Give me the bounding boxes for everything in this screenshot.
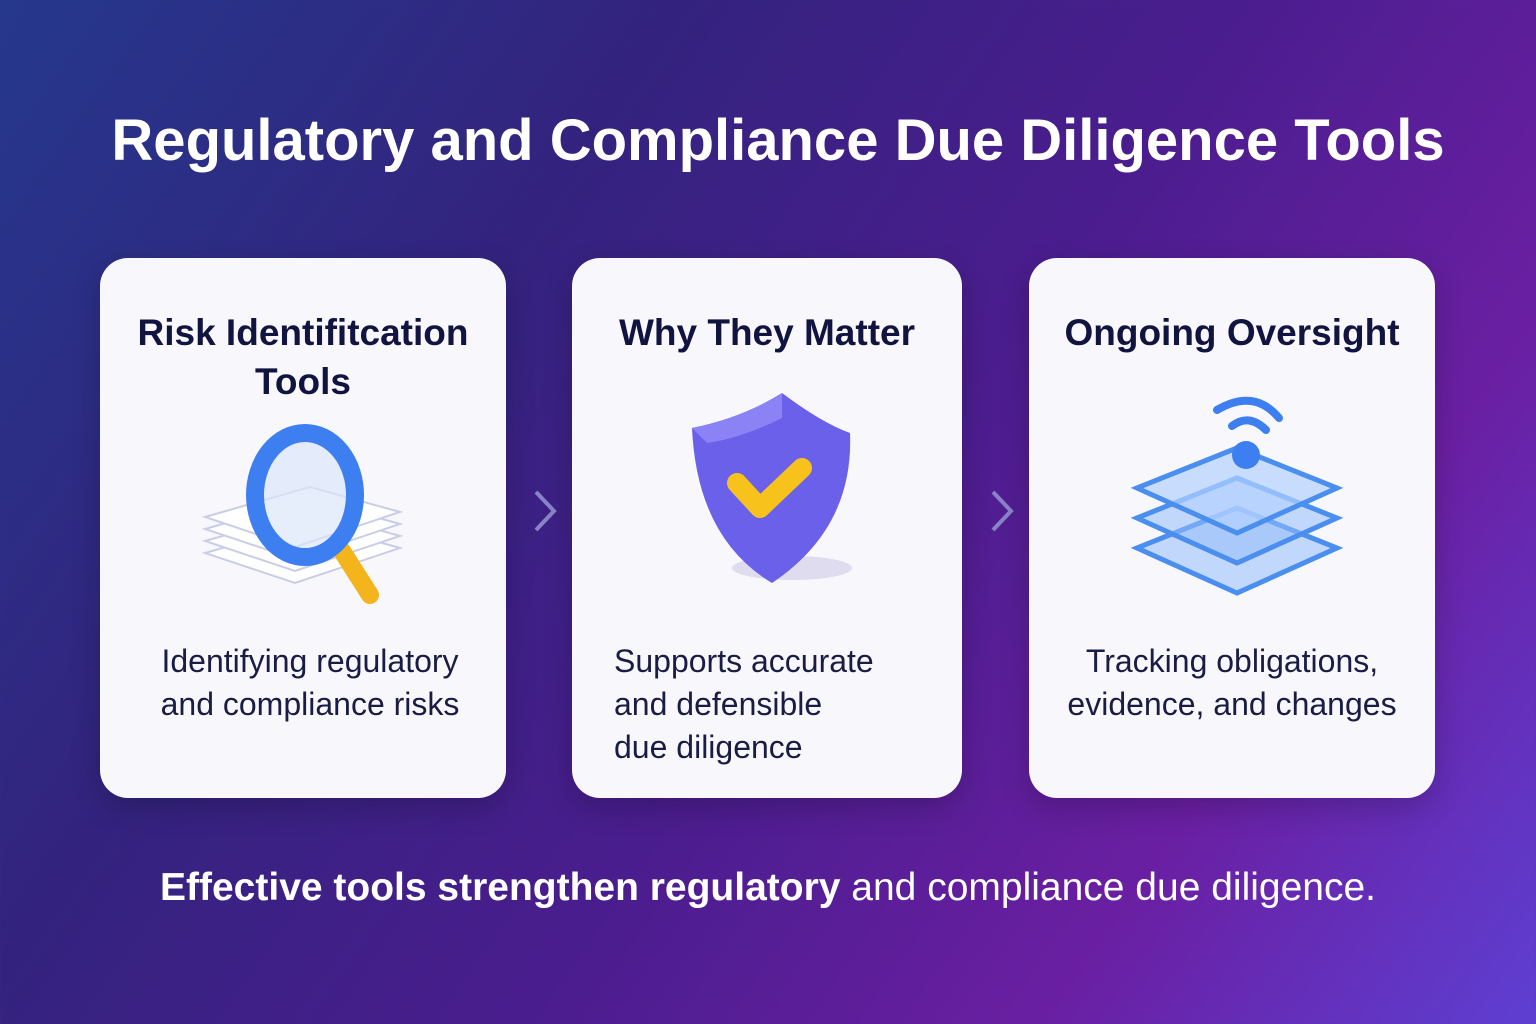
text: why they matter description: Supports accurate and defensible due diligence [614, 643, 874, 765]
icon: layered stack with signal [1130, 396, 1344, 596]
text: ongoing oversight description: Tracking obligations, evidence, and changes [1067, 643, 1397, 722]
arrow 1 [534, 490, 557, 532]
icon: magnifier over documents [202, 424, 404, 604]
arrow 2 [992, 490, 1014, 532]
heading: why they matter: Why They Matter [619, 312, 915, 353]
footer tagline: Effective tools strengthen regulatory and compliance due diligence. [160, 866, 1376, 909]
panel: risk identification [100, 258, 506, 798]
heading: risk identification: Risk Identifitcation [138, 312, 468, 353]
heading: risk identification: Tools [255, 361, 351, 402]
icon: shield with check [692, 393, 852, 583]
heading: risk identification [138, 312, 468, 402]
panel: why they matter [572, 258, 962, 798]
text: risk identification description: Identifying regulatory and compliance risks [161, 643, 459, 722]
title: Regulatory and Compliance Due Diligence Tools [111, 108, 1445, 173]
heading: ongoing oversight: Ongoing Oversight [1064, 312, 1400, 353]
panel: ongoing oversight [1029, 258, 1435, 798]
